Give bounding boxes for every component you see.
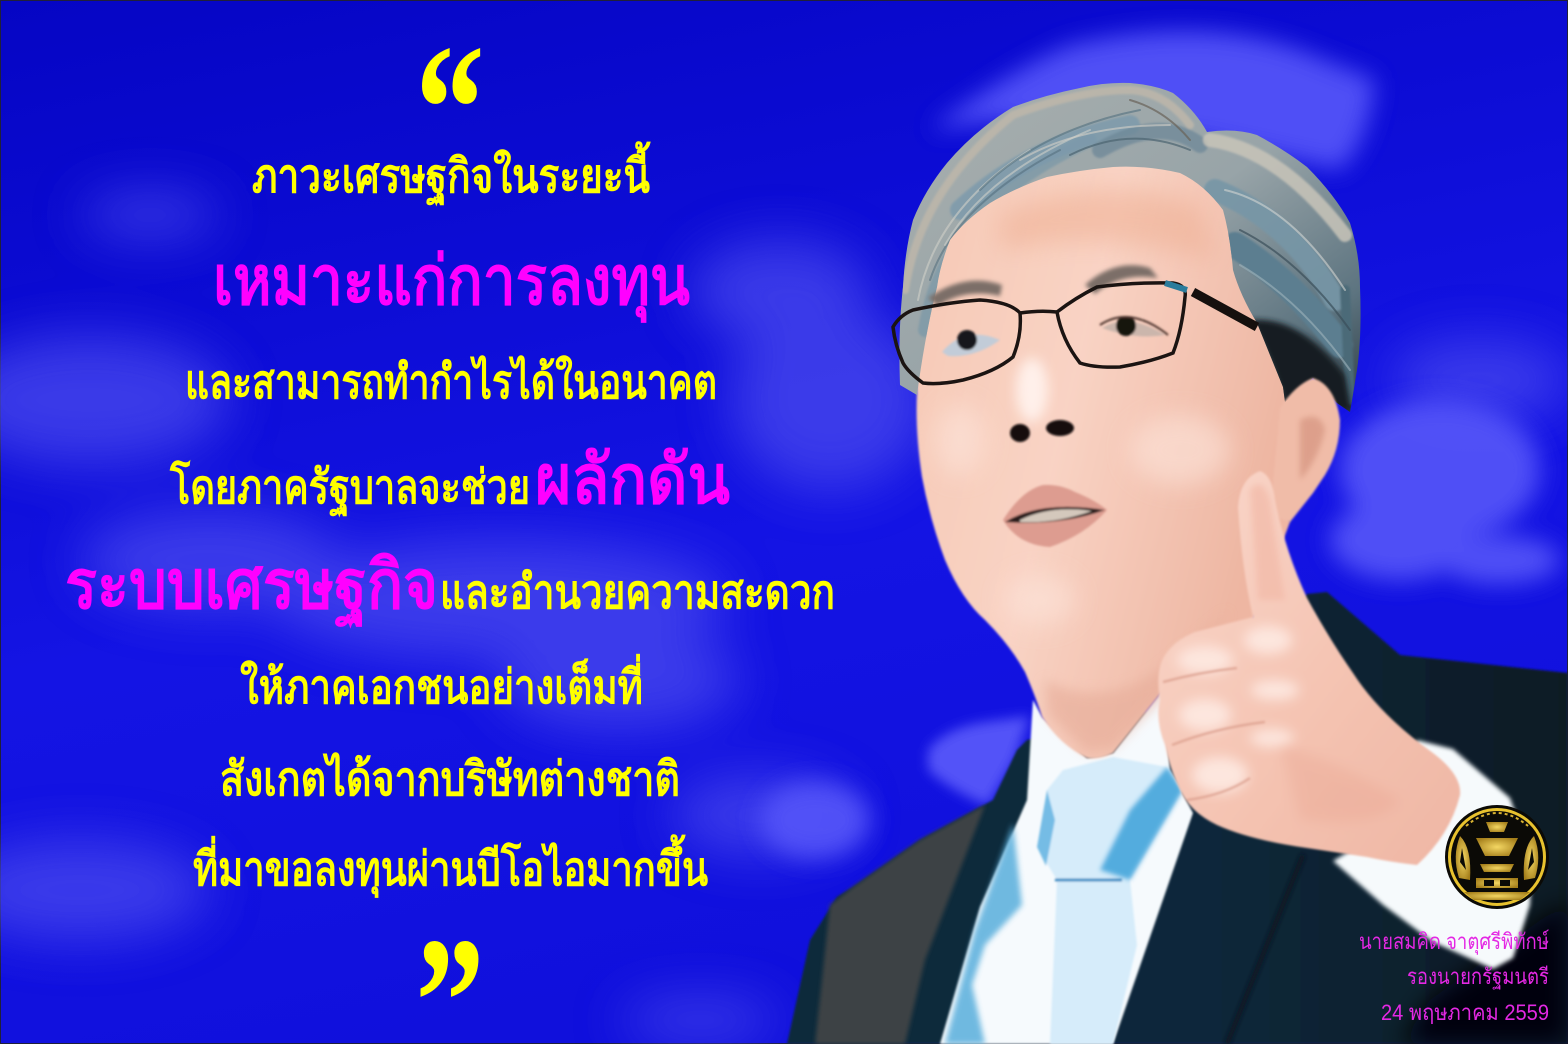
line 2 highlight: เหมาะแก่การลงทุน [213,243,690,323]
headline quote text [65,141,835,898]
mouth [1003,485,1107,547]
neck shadow [1045,610,1230,752]
caption: speaker name, title and date [1359,929,1549,1025]
jacket lapel crease [1227,855,1303,1044]
line 5: และอำนวยความสะดวก [440,565,835,618]
eyes [942,316,1168,356]
line 3: และสามารถทำกำไรได้ในอนาคต [185,354,717,408]
opening quotation mark: “ [415,7,485,212]
cheek highlights [935,405,1230,625]
date: 24 พฤษภาคม 2559 [1381,1000,1549,1025]
photo: minister portrait [787,75,1568,1044]
glasses [893,283,1257,384]
line 6: ให้ภาคเอกชนอย่างเต็มที่ [240,653,643,713]
hair [890,75,1370,420]
line 7: สังเกตได้จากบริษัทต่างชาติ [220,751,680,805]
icon: government seal [1445,805,1549,909]
face and neck [912,142,1290,758]
ear [1270,378,1340,522]
necktie [1037,757,1183,1044]
line 1: ภาวะเศรษฐกิจในระยะนี้ [252,141,651,207]
shirt cuff [1333,740,1532,969]
jacket left grey panel [815,805,985,1044]
line 4 highlight: ผลักดัน [535,442,730,518]
eyebrows [928,265,1158,306]
ear inner shadow [1300,417,1325,480]
hand with thumb up [1158,471,1460,865]
shirt [940,690,1193,1044]
forehead warm tone [1000,190,1215,260]
nose highlight and nostrils [1010,358,1074,442]
suit jacket [787,592,1568,1044]
line 5 highlight: ระบบเศรษฐกิจ [65,547,438,629]
line 8: ที่มาขอลงทุนผ่านบีโอไอมากขึ้น [193,834,708,898]
shirt blue shading [945,823,1022,1044]
jacket bottom-right shadow [1400,900,1568,1044]
line 4: โดยภาครัฐบาลจะช่วย [169,459,530,518]
